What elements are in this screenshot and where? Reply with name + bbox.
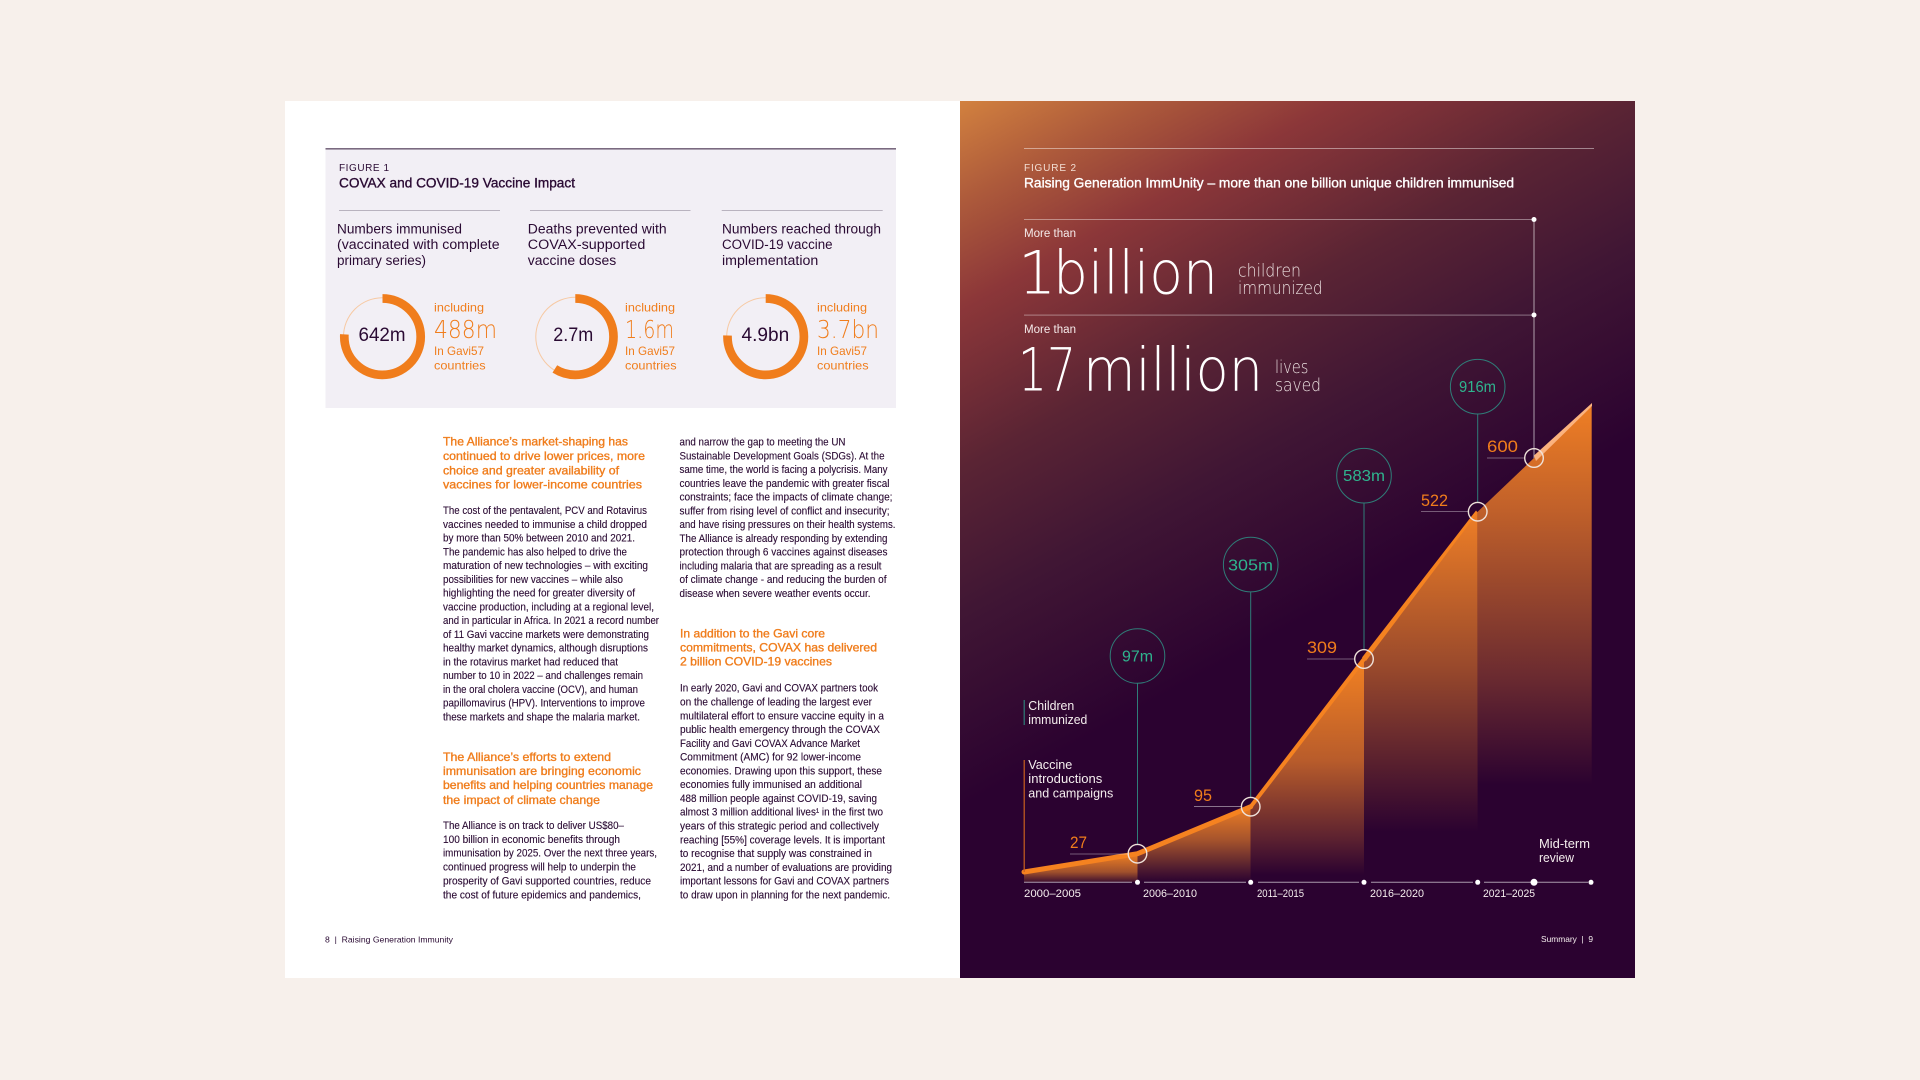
text block: economic benefits: 100 billion in economic benefits through — [443, 834, 620, 846]
text block: COVAX partners: reaching [55%] coverage levels. It is important — [680, 834, 885, 846]
text block: sustainable development: constraints; face the impacts of climate change; — [680, 492, 892, 504]
text block: cost of vaccines: vaccine production, including at a regional level, — [443, 601, 654, 613]
value: 522: 522 — [1421, 491, 1448, 510]
column 1: numbers immunised: (vaccinated with complete — [337, 237, 500, 252]
legend: vaccine introductions and campaigns: Vaccine — [1028, 758, 1072, 772]
column 1: numbers immunised: In Gavi57 — [434, 344, 484, 358]
legend: children immunized — [1024, 699, 1087, 727]
heading: COVAX delivered — [680, 627, 877, 668]
column 2: deaths prevented: 1.6m — [625, 315, 674, 344]
text block: sustainable development: disease when severe weather events occur. — [680, 588, 870, 600]
callout: 583m — [1337, 448, 1391, 650]
figure 2 header: Raising Generation ImmUnity – more than one billion unique children immunised — [1024, 175, 1514, 191]
heading: extending immunisation: The Alliance’s efforts to extend — [443, 751, 611, 764]
value: 27 — [1070, 833, 1147, 863]
callout: 305m: 305m — [1228, 557, 1273, 574]
text block: cost of vaccines: vaccines needed to immunise a child dropped — [443, 519, 647, 531]
stat: 17 million lives saved: million — [1083, 336, 1263, 406]
donut: 642m — [344, 298, 422, 376]
text block: sustainable development: of climate change - and reducing the burden of — [680, 574, 887, 586]
legend: vaccine introductions and campaigns: and campaigns — [1028, 786, 1113, 800]
stat: 17 million lives saved: lives — [1275, 357, 1308, 378]
column 2: deaths prevented — [528, 221, 677, 376]
text block: cost of vaccines: of 11 Gavi vaccine markets were demonstrating — [443, 629, 649, 641]
legend: vaccine introductions and campaigns: introductions — [1028, 772, 1102, 786]
callout: 97m — [1110, 629, 1165, 844]
text block: economic benefits — [443, 820, 657, 901]
text block: sustainable development: and narrow the gap to meeting the UN — [680, 437, 846, 449]
donut: 4.9bn: 4.9bn — [742, 325, 789, 346]
stat: 1 billion children immunized — [1018, 228, 1323, 309]
stat: 1 billion children immunized: 1 — [1018, 239, 1056, 309]
text block: COVAX partners: economies fully immunised an additional — [680, 779, 862, 791]
mid-term review line and rules — [1024, 217, 1536, 882]
panel: figure 1 COVAX impact — [326, 148, 896, 408]
column 2: deaths prevented: COVAX-supported — [528, 237, 645, 252]
stat: 17 million lives saved — [1018, 324, 1321, 406]
stat: 1 billion children immunized: children — [1238, 261, 1301, 282]
figure 2 header — [1024, 148, 1594, 191]
donut: 2.7m: 2.7m — [553, 325, 593, 346]
column 3: numbers reached — [722, 221, 881, 376]
figure 2 header: FIGURE 2 — [1024, 163, 1076, 174]
column 2: deaths prevented: countries — [625, 358, 677, 372]
callout: 583m: 583m — [1343, 468, 1385, 485]
column 2: deaths prevented: vaccine doses — [528, 253, 617, 268]
footer left: 8 | Raising Generation Immunity — [325, 934, 454, 944]
timeline axis: 2006–2010 — [1143, 888, 1197, 900]
text block: COVAX partners: Facility and Gavi COVAX Advance Market — [680, 738, 860, 750]
text block: COVAX partners: to recognise that supply was constrained in — [680, 848, 872, 860]
legend: children immunized: immunized — [1028, 713, 1087, 727]
figure 1 title: COVAX and COVID-19 Vaccine Impact — [339, 175, 575, 191]
figure 1 label: FIGURE 1 — [339, 163, 389, 174]
text block: cost of vaccines: possibilities for new vaccines – while also — [443, 574, 623, 586]
text block: cost of vaccines: in the oral cholera vaccine (OCV), and human — [443, 684, 638, 696]
text block: COVAX partners: In early 2020, Gavi and COVAX partners took — [680, 683, 879, 695]
heading: extending immunisation: the impact of climate change — [443, 794, 600, 807]
text block: economic benefits: prosperity of Gavi supported countries, reduce — [443, 875, 651, 887]
teal stems and circles: children immunized — [1110, 359, 1505, 844]
text block: sustainable development — [680, 437, 896, 600]
text block: COVAX partners: important lessons for Gavi and COVAX partners — [680, 876, 889, 888]
text block: economic benefits: The Alliance is on track to deliver US$80– — [443, 820, 624, 832]
text block: cost of vaccines: by more than 50% between 2010 and 2021. — [443, 532, 635, 544]
text block: cost of vaccines: The cost of the pentavalent, PCV and Rotavirus — [443, 505, 647, 517]
value: 600: 600 — [1487, 437, 1518, 456]
text block: COVAX partners: multilateral effort to ensure vaccine equity in a — [680, 710, 884, 722]
text block: sustainable development: and have rising pressures on their health systems. — [680, 519, 896, 531]
column 3: numbers reached: countries — [817, 358, 869, 372]
text block: cost of vaccines: and in particular in Africa. In 2021 a record number — [443, 615, 659, 627]
footer right: Summary | 9 — [1541, 934, 1593, 944]
heading: extending immunisation: benefits and helping countries manage — [443, 779, 653, 792]
heading: COVAX delivered: In addition to the Gavi core — [680, 627, 825, 640]
value: 95 — [1194, 786, 1260, 816]
text block: sustainable development: Sustainable Development Goals (SDGs). At the — [680, 450, 885, 462]
column 1: numbers immunised: primary series) — [337, 253, 426, 268]
text block: sustainable development: same time, the world is facing a polycrisis. Many — [680, 464, 888, 476]
column 3: numbers reached: Numbers reached through — [722, 221, 881, 236]
data point values with leaders — [1070, 437, 1543, 863]
callout: 97m: 97m — [1122, 649, 1153, 666]
text block: cost of vaccines: number to 10 in 2022 – and challenges remain — [443, 670, 643, 682]
left page — [285, 101, 960, 978]
column 1: numbers immunised: countries — [434, 358, 486, 372]
heading: COVAX delivered: 2 billion COVID-19 vaccines — [680, 655, 832, 668]
text block: cost of vaccines: these markets and shape the malaria market. — [443, 711, 640, 723]
timeline axis: 2000–2005 — [1024, 888, 1081, 900]
text block: cost of vaccines: highlighting the need for greater diversity of — [443, 588, 635, 600]
text block: COVAX partners: on the challenge of leading the largest ever — [680, 696, 872, 708]
callout: 916m: 916m — [1459, 379, 1496, 396]
text block: COVAX partners — [680, 683, 892, 901]
label: mid-term review: review — [1539, 851, 1575, 865]
text block: COVAX partners: 488 million people against COVID-19, saving — [680, 793, 877, 805]
text block: economic benefits: the cost of future epidemics and pandemics, — [443, 889, 641, 901]
stat: 17 million lives saved: saved — [1275, 375, 1321, 396]
column 3: numbers reached: implementation — [722, 253, 818, 268]
column 1: numbers immunised: 488m — [434, 315, 497, 344]
text block: cost of vaccines: papillomavirus (HPV). Interventions to improve — [443, 698, 645, 710]
text block: cost of vaccines: The pandemic has also helped to drive the — [443, 546, 627, 558]
heading: market-shaping — [443, 436, 645, 492]
callout: 305m — [1223, 537, 1278, 797]
heading: market-shaping: The Alliance’s market-shaping has — [443, 436, 628, 449]
text block: sustainable development: The Alliance is already responding by extending — [680, 533, 888, 545]
stat: 17 million lives saved: More than — [1024, 324, 1076, 336]
legend: vaccine introductions and campaigns — [1024, 758, 1113, 872]
column 1: numbers immunised: Numbers immunised — [337, 221, 462, 236]
text block: COVAX partners: economies. Drawing upon this support, these — [680, 765, 882, 777]
value: 309 — [1307, 638, 1373, 668]
column 2: deaths prevented: In Gavi57 — [625, 344, 675, 358]
column 3: numbers reached: 3.7bn — [817, 315, 879, 344]
value: 27: 27 — [1070, 833, 1087, 852]
area chart: vaccine introductions and campaigns — [1024, 403, 1592, 882]
heading: market-shaping: continued to drive lower prices, more — [443, 450, 645, 463]
callout: 916m — [1450, 359, 1505, 502]
text block: sustainable development: protection through 6 vaccines against diseases — [680, 547, 888, 559]
column 1: numbers immunised — [337, 221, 500, 376]
text block: cost of vaccines: in the rotavirus market had reduced that — [443, 656, 618, 668]
stat: 1 billion children immunized: billion — [1053, 239, 1218, 309]
label: mid-term review — [1539, 837, 1590, 865]
heading: market-shaping: choice and greater availability of — [443, 465, 620, 478]
donut: 642m: 642m — [358, 325, 406, 346]
heading: COVAX delivered: commitments, COVAX has delivered — [680, 641, 877, 654]
text block: sustainable development: suffer from rising level of conflict and insecurity; — [680, 505, 890, 517]
donut: 4.9bn — [727, 298, 805, 376]
timeline axis: 2016–2020 — [1370, 888, 1424, 900]
text block: COVAX partners: 2021, and a number of evaluations are providing — [680, 862, 892, 874]
column 3: numbers reached: COVID-19 vaccine — [722, 237, 833, 252]
text block: cost of vaccines — [443, 505, 659, 723]
timeline axis: 2021–2025 — [1483, 888, 1535, 900]
text block: economic benefits: continued progress will help to underpin the — [443, 862, 636, 874]
text block: sustainable development: including malaria that are spreading as a result — [680, 560, 882, 572]
right page background — [960, 101, 1635, 978]
heading: market-shaping: vaccines for lower-income countries — [443, 479, 642, 492]
text block: cost of vaccines: healthy market dynamics, although disruptions — [443, 642, 648, 654]
donut: 2.7m — [536, 297, 615, 376]
value: 522 — [1421, 491, 1487, 521]
value: 95: 95 — [1194, 786, 1212, 805]
text block: COVAX partners: almost 3 million additional lives¹ in the first two — [680, 807, 883, 819]
heading: extending immunisation: immunisation are bringing economic — [443, 765, 641, 778]
column 3: numbers reached: including — [817, 301, 867, 315]
stat: 17 million lives saved: 17 — [1018, 336, 1076, 406]
text block: COVAX partners: public health emergency through the COVAX — [680, 724, 880, 736]
value: 600 — [1487, 437, 1543, 467]
timeline axis: 2011–2015 — [1257, 888, 1304, 900]
column 2: deaths prevented: Deaths prevented with — [528, 221, 667, 236]
label: mid-term review: Mid-term — [1539, 837, 1590, 851]
value: 309: 309 — [1307, 638, 1337, 657]
timeline axis — [1024, 879, 1594, 900]
text block: COVAX partners: Commitment (AMC) for 92 lower-income — [680, 752, 861, 764]
legend: children immunized: Children — [1028, 699, 1074, 713]
text block: COVAX partners: years of this strategic period and collectively — [680, 820, 880, 832]
column 1: numbers immunised: including — [434, 301, 484, 315]
column 2: deaths prevented: including — [625, 301, 675, 315]
text block: economic benefits: immunisation by 2025. Over the next three years, — [443, 848, 657, 860]
text block: COVAX partners: to draw upon in planning for the next pandemic. — [680, 889, 890, 901]
stat: 1 billion children immunized: immunized — [1238, 278, 1323, 299]
stat: 1 billion children immunized: More than — [1024, 228, 1076, 240]
column 3: numbers reached: In Gavi57 — [817, 344, 867, 358]
heading: extending immunisation — [443, 751, 653, 807]
text block: sustainable development: countries leave the pandemic with greater fiscal — [680, 478, 890, 490]
text block: cost of vaccines: maturation of new technologies – with exciting — [443, 560, 648, 572]
